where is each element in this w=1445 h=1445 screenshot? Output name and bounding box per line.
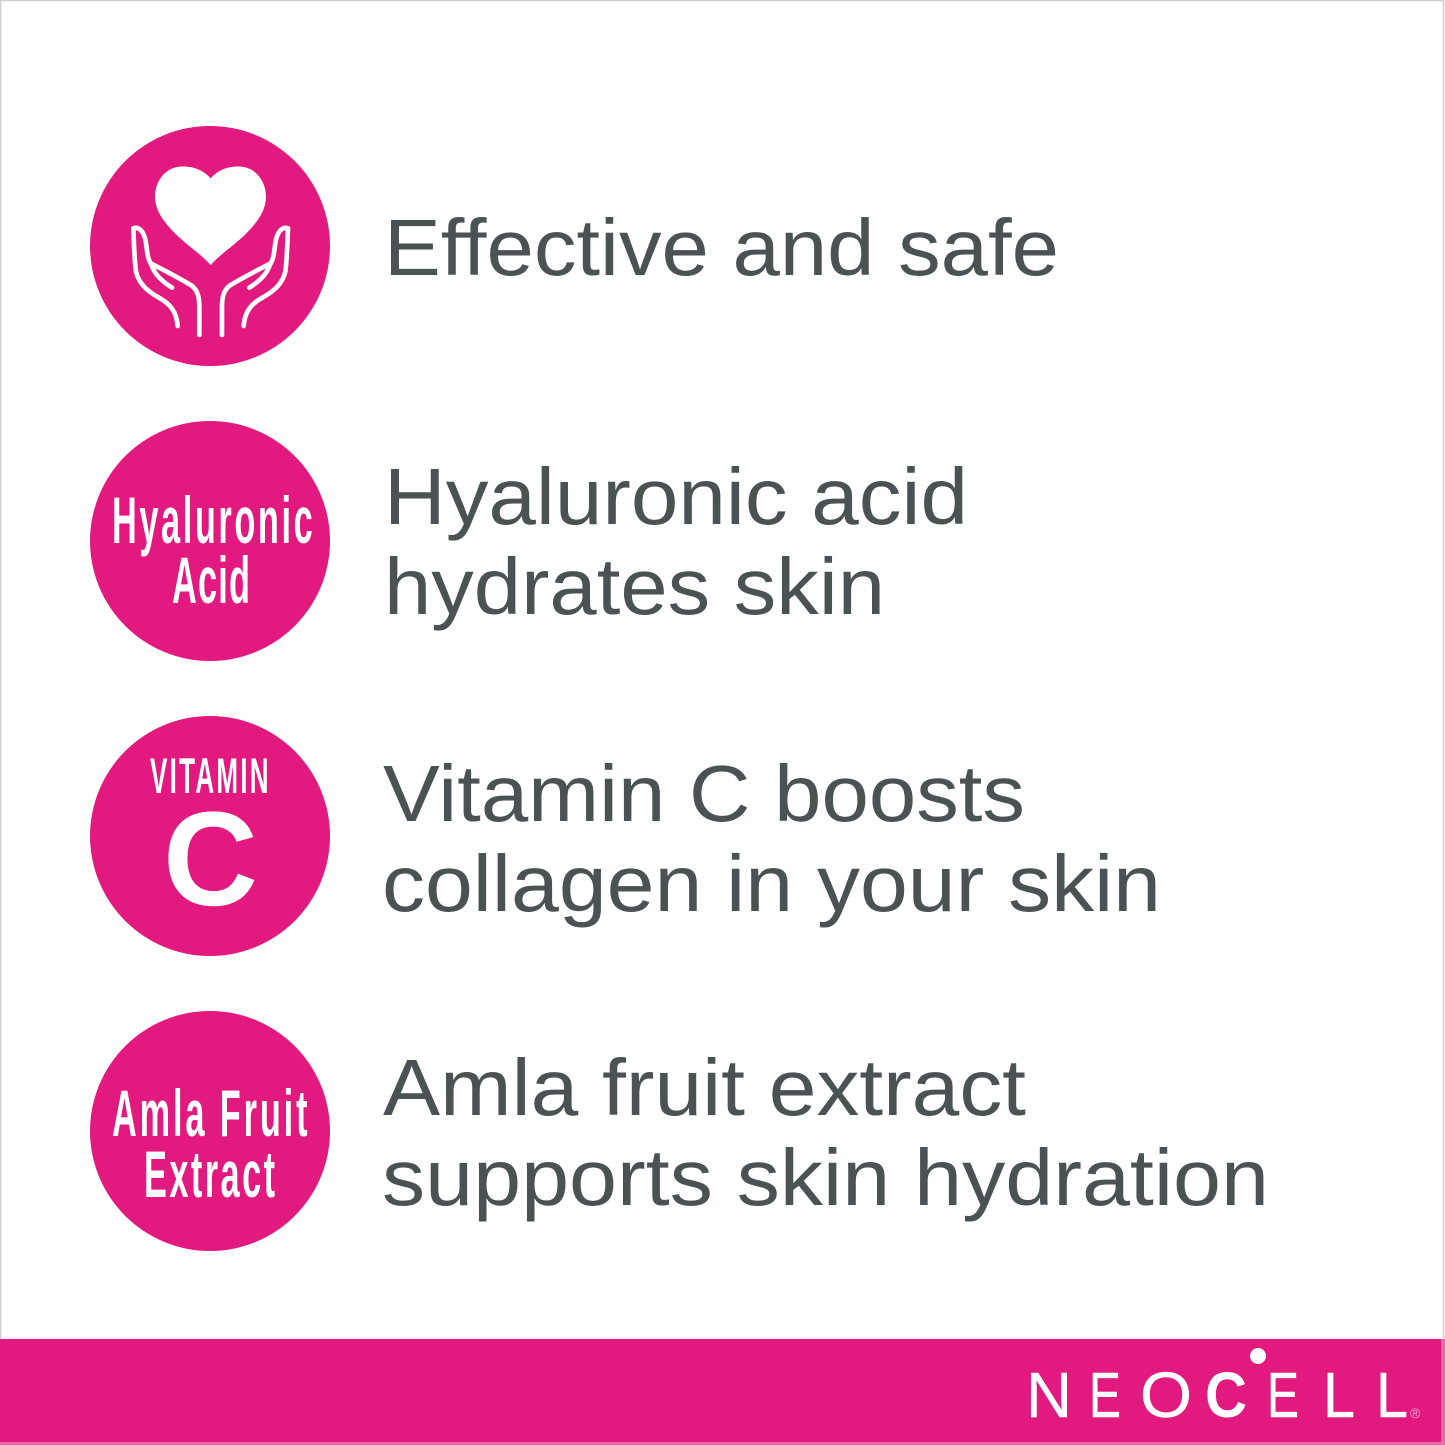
badge: vitamin c — [90, 716, 330, 956]
text: hyaluronic acid hydrates skin: Hyaluronic acid — [384, 452, 968, 541]
logo: neocell: E — [1267, 1359, 1299, 1431]
logo: neocell: L — [1376, 1359, 1408, 1431]
text: amla fruit extract supports skin hydration: supports skin hydration — [382, 1133, 1269, 1222]
row: amla fruit extract — [90, 1011, 1269, 1251]
logo: neocell: C — [1205, 1359, 1247, 1431]
heading: effective and safe: Effective and safe — [384, 203, 1059, 292]
logo: neocell: L — [1323, 1359, 1355, 1431]
row: vitamin c — [90, 716, 1161, 956]
text: vitamin c boosts collagen — [382, 749, 1161, 928]
text: amla fruit extract supports skin hydration: Amla fruit extract — [383, 1043, 1026, 1132]
logo: neocell: ® — [1410, 1405, 1421, 1421]
badge: vitamin c: C — [163, 785, 258, 934]
text: hyaluronic acid hydrates skin: hydrates skin — [384, 542, 885, 631]
logo: neocell — [1026, 1348, 1421, 1431]
icon: heart in hands — [90, 126, 330, 366]
badge: hyaluronic acid: Hyaluronic — [112, 484, 313, 558]
text: vitamin c boosts collagen: Vitamin C boosts — [383, 749, 1025, 838]
row: hyaluronic acid — [90, 421, 968, 661]
text: vitamin c boosts collagen: collagen in your skin — [382, 839, 1161, 928]
badge: amla fruit extract — [90, 1011, 330, 1251]
row: effective and safe — [90, 126, 1059, 366]
text: hyaluronic acid hydrates skin — [384, 452, 968, 631]
badge: amla fruit extract: Amla Fruit — [112, 1077, 308, 1151]
logo: neocell: E — [1089, 1359, 1121, 1431]
logo: neocell: O — [1140, 1359, 1192, 1431]
badge: amla fruit extract: Extract — [144, 1138, 275, 1212]
badge: vitamin c: VITAMIN — [150, 749, 269, 804]
footer banner — [0, 1339, 1445, 1445]
badge: hyaluronic acid — [90, 421, 330, 661]
text: amla fruit extract supports skin hydration — [382, 1043, 1269, 1222]
badge: hyaluronic acid: Acid — [172, 544, 250, 618]
logo: neocell: N — [1026, 1359, 1072, 1431]
